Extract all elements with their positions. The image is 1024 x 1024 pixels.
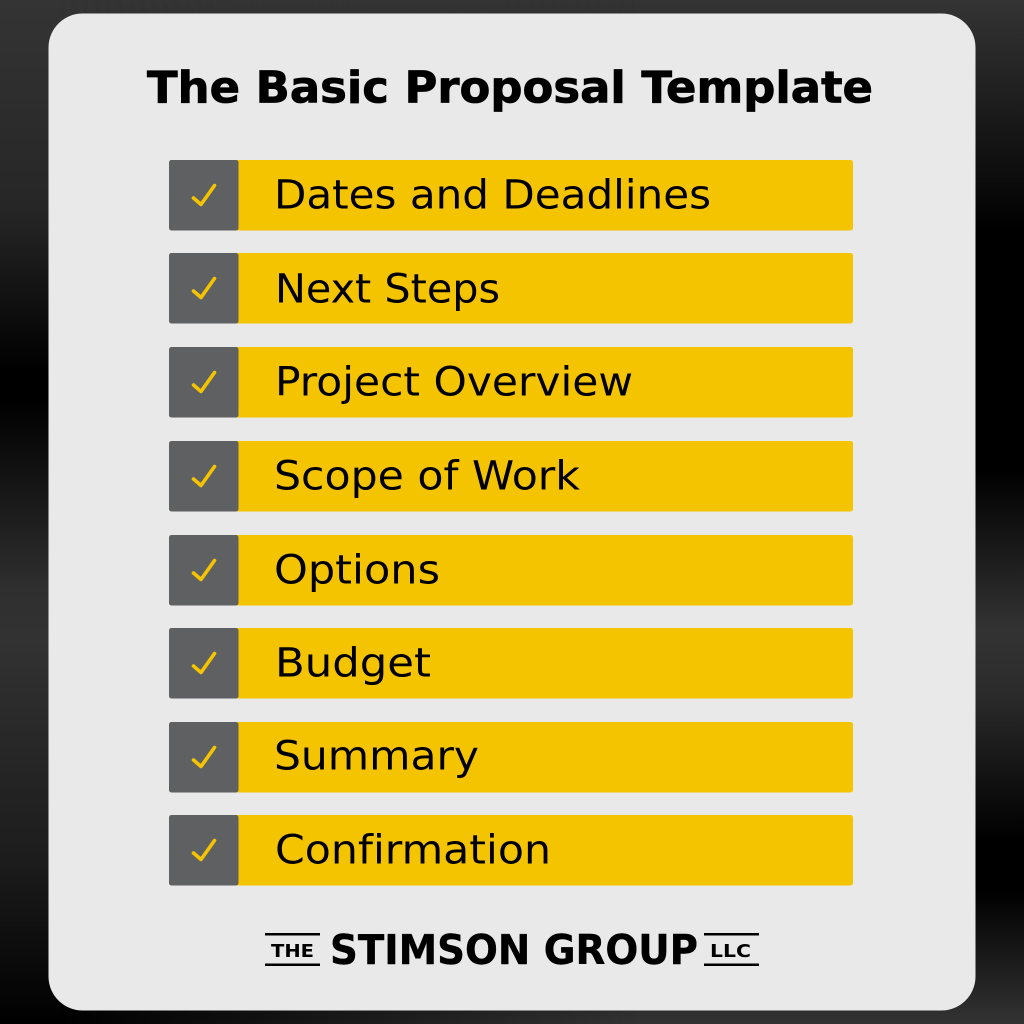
row: Dates and Deadlines [169, 160, 853, 230]
label: Summary: Summary [274, 734, 479, 780]
label: Confirmation: Confirmation [275, 828, 551, 874]
logo: The Stimson Group LLC: LLC [710, 941, 751, 962]
logo: The Stimson Group LLC: STIMSON GROUP [330, 926, 698, 974]
label: Project Overview: Project Overview [275, 360, 633, 406]
icon: checkbox [169, 160, 238, 230]
title: The Basic Proposal Template [147, 62, 873, 114]
label: Scope of Work: Scope of Work [274, 454, 581, 500]
row: Budget [169, 628, 853, 698]
row: Scope of Work [169, 441, 853, 512]
row: Options [169, 535, 853, 606]
icon: checkbox [169, 628, 238, 698]
icon: checkbox [169, 441, 238, 512]
checklist [169, 160, 853, 886]
label: Budget: Budget [275, 640, 431, 686]
row: Summary [169, 722, 853, 792]
row: Next Steps [169, 253, 853, 324]
logo: The Stimson Group LLC: THE [271, 941, 314, 962]
label: Options: Options [274, 548, 440, 594]
label: Dates and Deadlines: Dates and Deadlines [274, 172, 711, 218]
icon: checkbox [169, 535, 238, 606]
icon: checkbox [169, 815, 238, 886]
icon: checkbox [169, 722, 238, 792]
row: Project Overview [169, 347, 853, 418]
row: Confirmation [169, 815, 853, 886]
icon: checkbox [169, 347, 238, 418]
label: Next Steps: Next Steps [275, 266, 500, 312]
icon: checkbox [169, 253, 238, 324]
